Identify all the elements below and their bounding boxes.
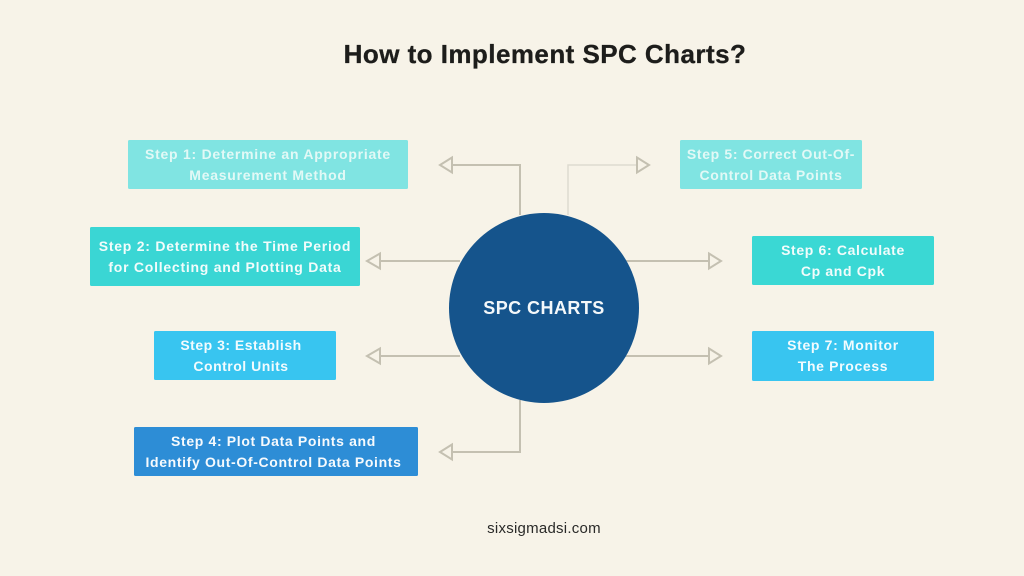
step 1 box: Measurement Method: [189, 166, 347, 182]
arrow: step 6: [625, 254, 721, 268]
title: How to Implement SPC Charts?: [344, 39, 746, 69]
step 2 box: [90, 227, 360, 286]
step 3 box: [154, 331, 336, 380]
step 1 box: [128, 140, 408, 189]
step 3 box: Step 3: Establish: [180, 336, 302, 352]
step 2 box: Step 2: Determine the Time Period: [99, 238, 351, 254]
website footer: sixsigmadsi.com: [487, 520, 601, 536]
central circle: SPC Charts: [449, 213, 639, 403]
step 5 box: [680, 140, 862, 189]
arrow: step 4: [440, 400, 520, 460]
arrow: step 2: [367, 254, 460, 268]
step 6 box: Cp and Cpk: [801, 262, 885, 278]
arrow: step 5: [568, 158, 649, 215]
step 4 box: [134, 427, 418, 476]
step 4 box: Identify Out-Of-Control Data Points: [145, 454, 402, 470]
step 6 box: Step 6: Calculate: [781, 242, 905, 258]
step 5 box: Control Data Points: [699, 166, 843, 182]
arrow: step 3: [367, 348, 460, 364]
step 7 box: Step 7: Monitor: [787, 337, 899, 353]
step 1 box: Step 1: Determine an Appropriate: [145, 146, 391, 162]
step 4 box: Step 4: Plot Data Points and: [171, 432, 376, 448]
arrow: step 1: [440, 158, 520, 215]
step 5 box: Step 5: Correct Out-Of-: [687, 146, 855, 162]
step 7 box: [752, 331, 934, 381]
step 3 box: Control Units: [193, 358, 289, 374]
step 7 box: The Process: [798, 358, 888, 374]
step 6 box: [752, 236, 934, 285]
step 2 box: for Collecting and Plotting Data: [108, 258, 342, 274]
central circle: SPC Charts: SPC CHARTS: [483, 298, 605, 318]
arrow: step 7: [625, 348, 721, 364]
